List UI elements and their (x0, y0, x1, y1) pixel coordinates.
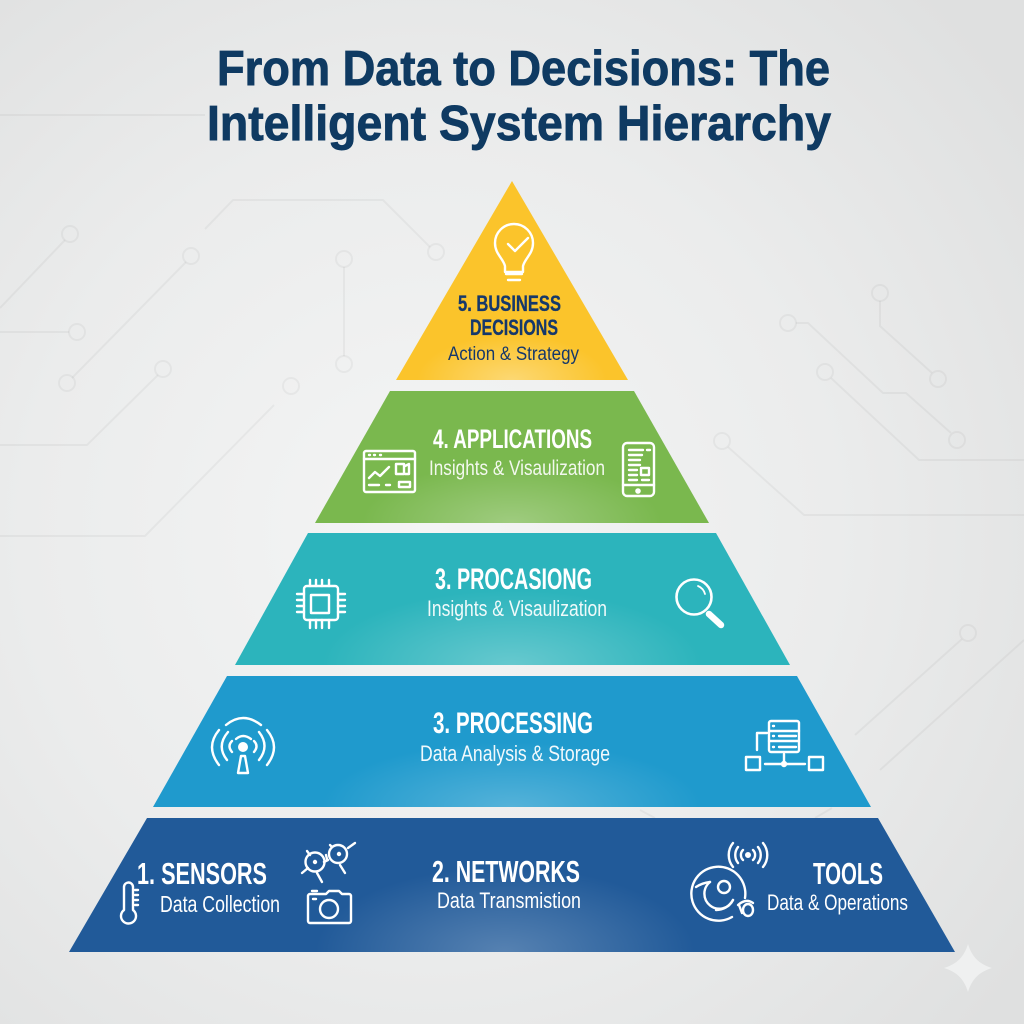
tier 1: sensors, networks, tools (69, 818, 955, 952)
tier 2: processing (153, 676, 871, 807)
icon: signal broadcast (729, 843, 767, 867)
icon: camera (308, 891, 351, 923)
tier 4 label: 4. APPLICATIONS (433, 424, 592, 454)
title (207, 42, 831, 151)
tier 2 label: 3. PROCESSING (433, 707, 593, 740)
tier 3: procasiong (235, 533, 790, 665)
tier 2 label: Data Analysis & Storage (420, 741, 610, 766)
tier 5 label (448, 291, 579, 365)
tier 4 label (429, 424, 605, 480)
label: tools (767, 856, 908, 915)
label: networks (432, 854, 581, 913)
tier 3 upper label: 3. PROCASIONG (435, 563, 592, 596)
icon: antenna with signal waves (212, 718, 274, 773)
icon: microchip (297, 580, 345, 628)
icon: eye in circle with touch (691, 867, 753, 921)
title: From Data to Decisions: The (217, 42, 830, 96)
icon: sensor nodes (302, 843, 355, 882)
tier 5 shape (396, 181, 628, 380)
icon: magnifying glass (676, 580, 721, 625)
label: sensors: Data Collection (160, 891, 280, 917)
label: tools: Data & Operations (767, 890, 908, 915)
tier 4 label: Insights & Visaulization (429, 457, 605, 480)
icon: thermometer (121, 882, 138, 924)
circuit pattern background (0, 115, 1024, 818)
icon: light bulb with check (495, 224, 533, 280)
label: tools: TOOLS (813, 856, 883, 891)
label: networks: 2. NETWORKS (432, 854, 580, 889)
icon: dashboard window (364, 451, 415, 492)
label: networks: Data Transmistion (437, 888, 581, 913)
tier 2 shape (153, 676, 871, 807)
icon: sparkle star (944, 944, 992, 992)
label: sensors: 1. SENSORS (137, 856, 267, 891)
tier 3 upper label (427, 563, 607, 621)
tier 5: business decisions (396, 181, 628, 380)
icon: smartphone (623, 443, 654, 496)
icon: server network (746, 721, 823, 770)
tier 1 shape (69, 818, 955, 952)
tier 3 upper label: Insights & Visaulization (427, 596, 607, 621)
tier 3 upper shape (235, 533, 790, 665)
title: Intelligent System Hierarchy (207, 97, 831, 151)
tier 5 label: DECISIONS (470, 315, 558, 340)
tier 2 label (420, 707, 610, 766)
label: sensors (137, 856, 280, 917)
tier 5 label: 5. BUSINESS (458, 291, 561, 316)
tier 4: applications (315, 391, 709, 523)
tier 5 label: Action & Strategy (448, 344, 579, 365)
tier 4 shape (315, 391, 709, 523)
